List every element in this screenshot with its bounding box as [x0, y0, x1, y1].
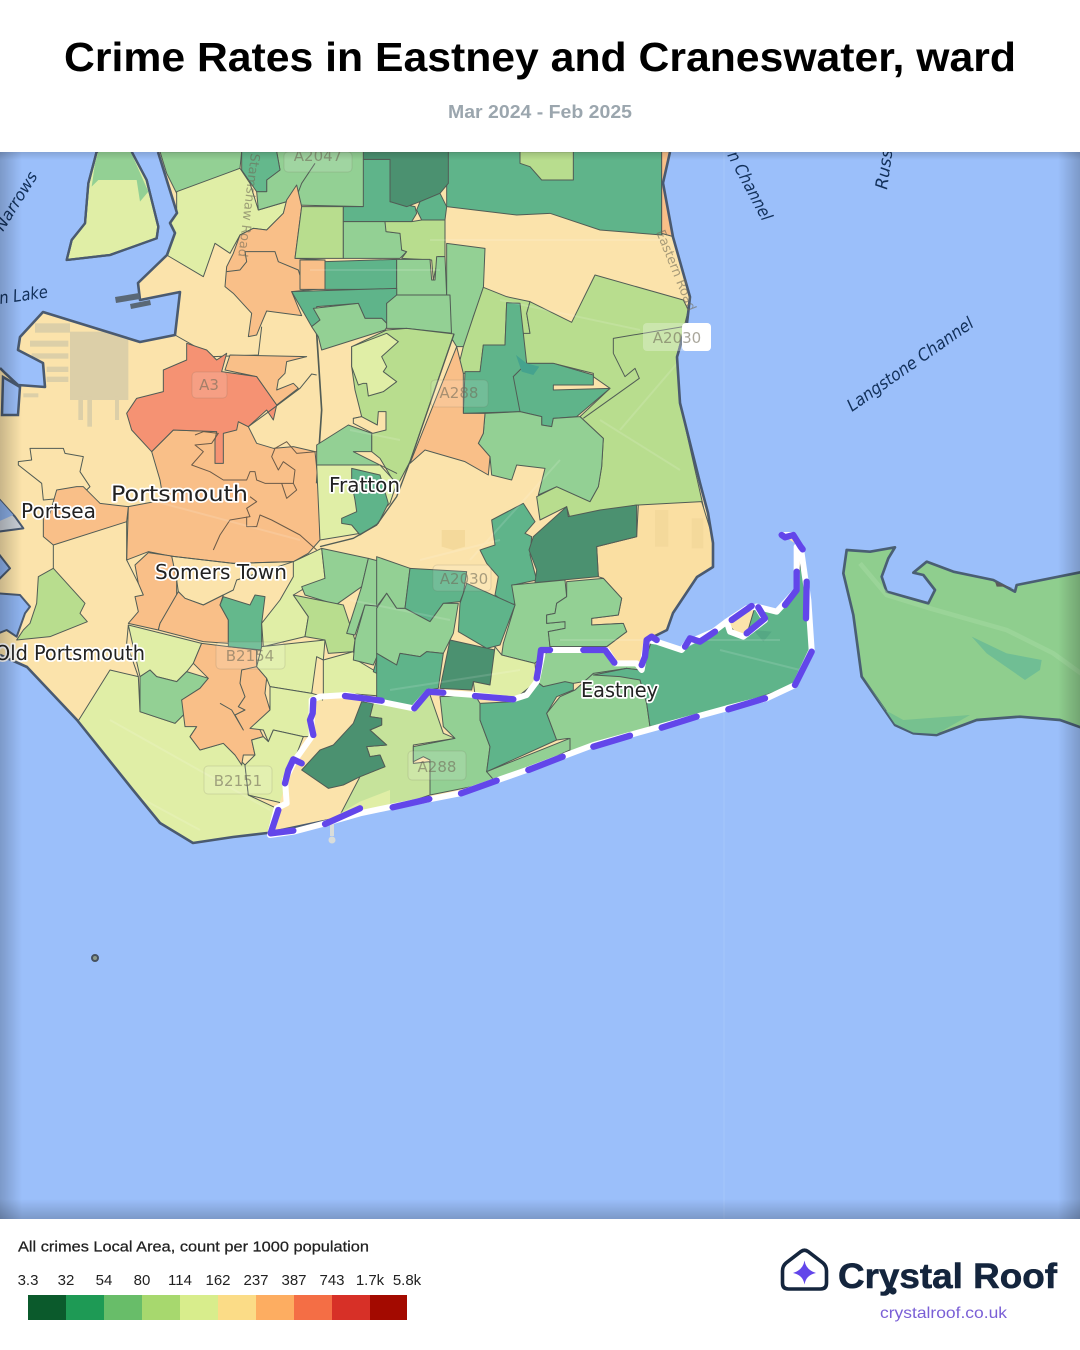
- orange internal boundaries: [192, 432, 317, 550]
- dockyard buildings: [23, 323, 128, 427]
- road shields and labels: A3: [199, 376, 219, 394]
- area: red, highest crime: [127, 343, 277, 463]
- water labels: Langstone Channel: [843, 314, 978, 416]
- legend scale values: 387: [281, 1272, 307, 1289]
- areas: north-west: [18, 152, 365, 563]
- boundary purple dashes: [271, 535, 812, 833]
- cream block west: [18, 448, 90, 500]
- map edge shading: [0, 152, 1080, 1219]
- legend: [18, 1238, 422, 1320]
- legend scale values: 743: [319, 1272, 345, 1289]
- place labels: Somers Town: [155, 560, 287, 584]
- place labels: Portsmouth: [111, 482, 248, 506]
- legend scale values: 5.8k: [393, 1272, 422, 1289]
- road shields and labels: A2030: [440, 570, 488, 588]
- legend scale values: 80: [134, 1272, 150, 1289]
- boundary white casing: [270, 535, 812, 835]
- legend scale values: 1.7k: [356, 1272, 385, 1289]
- road shields and labels: A288: [440, 384, 478, 402]
- faint street lines: [70, 240, 800, 830]
- legend scale values: 32: [58, 1272, 74, 1289]
- website url: crystalroof.co.uk: [880, 1305, 1008, 1322]
- ward interior tan: [280, 700, 323, 804]
- subtitle: date range: Mar 2024 - Feb 2025: [448, 102, 632, 122]
- road shields and labels: A2030: [653, 329, 701, 347]
- legend scale values: 237: [243, 1272, 269, 1289]
- areas: south-west and ward interior: [17, 487, 400, 847]
- mainland coastline: [0, 152, 713, 843]
- mainland base: [0, 152, 812, 843]
- water labels: Russ: [872, 148, 898, 191]
- legend scale values: [18, 1272, 422, 1289]
- road shields and labels: B2151: [214, 772, 262, 790]
- legend scale values: 54: [96, 1272, 112, 1289]
- legend scale values: 114: [168, 1272, 192, 1289]
- Hayling Island: [843, 547, 1080, 735]
- road shields and labels: Stamshaw Road: [234, 153, 262, 258]
- logo: Crystal Roof: [782, 1250, 1057, 1322]
- Whale Island: [67, 152, 158, 260]
- water labels: [0, 148, 978, 416]
- place labels: Fratton: [329, 473, 400, 497]
- road shields and labels: A288: [418, 758, 456, 776]
- areas: north and east: [292, 152, 703, 547]
- area: Portsea orange: [43, 487, 128, 545]
- place labels: [0, 473, 658, 702]
- legend scale values: 162: [205, 1272, 231, 1289]
- road shields and labels: A2047: [294, 147, 342, 165]
- Old Portsmouth inlets: [0, 498, 30, 637]
- icon: house with star: [782, 1250, 826, 1289]
- road shields and labels: [192, 147, 711, 794]
- choropleth map panel: [0, 147, 1080, 1219]
- legend colour ramp: [28, 1295, 407, 1320]
- areas: Eastney and Southsea east: [338, 502, 813, 818]
- place labels: Portsea: [21, 499, 96, 523]
- icon: y-tail key: [889, 1287, 897, 1295]
- ward boundary: Eastney and Craneswater: [270, 535, 812, 835]
- legend title: All crimes Local Area, count per 1000 population: [18, 1238, 369, 1256]
- area: orange central band: [127, 422, 320, 563]
- harbour basin: [2, 377, 20, 415]
- pier: [328, 824, 336, 844]
- islet: [92, 955, 98, 961]
- cream ward lines: [175, 327, 262, 357]
- wordmark: Crystal Roof: [838, 1257, 1057, 1296]
- legend scale values: 3.3: [18, 1272, 38, 1289]
- sea background: [0, 152, 1080, 1219]
- water labels: n Channel: [723, 148, 776, 225]
- area: darkest patch in ward: [302, 702, 387, 788]
- crime-rate neighbourhood areas: [17, 152, 813, 847]
- Tipner jetty: [115, 293, 151, 309]
- road shields and labels: Eastern Road: [652, 228, 698, 313]
- place labels: Eastney: [581, 678, 658, 702]
- road shields and labels: B2154: [226, 647, 274, 665]
- title: Crime Rates in Eastney and Craneswater, ward: [64, 34, 1016, 80]
